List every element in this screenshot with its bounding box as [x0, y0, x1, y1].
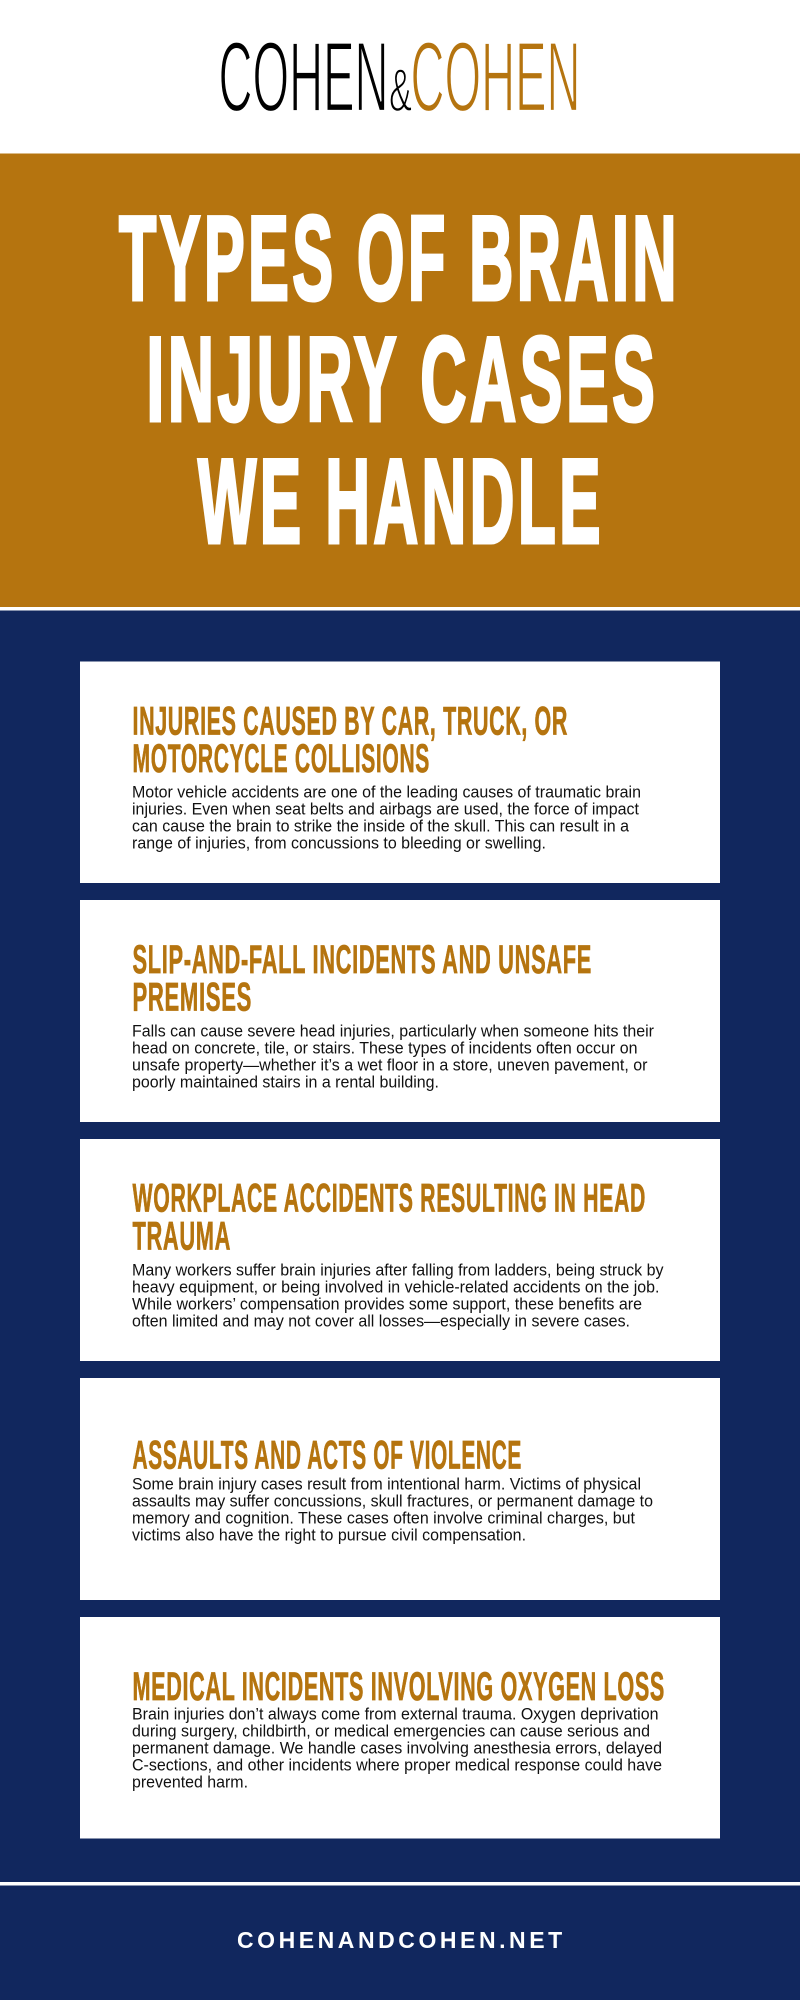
- title: [119, 192, 680, 568]
- panel: medical incidents involving oxygen loss: [80, 1617, 720, 1838]
- heading: TRAUMA: [132, 1214, 231, 1258]
- body text: assaults may suffer concussions, skull fractures, or permanent damage to: [132, 1492, 653, 1510]
- body text: during surgery, childbirth, or medical emergencies can cause serious and: [132, 1722, 650, 1740]
- body text: C-sections, and other incidents where proper medical response could have: [132, 1756, 662, 1774]
- body text: victims also have the right to pursue civil compensation.: [132, 1526, 526, 1544]
- body text: [132, 1022, 654, 1092]
- body text: permanent damage. We handle cases involving anesthesia errors, delayed: [132, 1738, 662, 1758]
- body text: While workers’ compensation provides some support, these benefits are: [132, 1294, 642, 1314]
- body text: Some brain injury cases result from intentional harm. Victims of physical: [132, 1474, 641, 1494]
- heading: [132, 1177, 646, 1258]
- body text: unsafe property—whether it’s a wet floor in a store, uneven pavement, or: [132, 1056, 648, 1074]
- body text: range of injuries, from concussions to bleeding or swelling.: [132, 834, 546, 852]
- body text: heavy equipment, or being involved in vehicle-related accidents on the job.: [132, 1278, 660, 1296]
- heading: [132, 938, 592, 1020]
- navy content background: [0, 610, 800, 2000]
- body text: head on concrete, tile, or stairs. These types of incidents often occur on: [132, 1038, 638, 1058]
- body text: Brain injuries don’t always come from external trauma. Oxygen deprivation: [132, 1704, 658, 1724]
- body text: [132, 1704, 662, 1792]
- body text: poorly maintained stairs in a rental building.: [132, 1072, 439, 1092]
- panel: car, truck, motorcycle collisions: [80, 662, 720, 883]
- body text: prevented harm.: [132, 1772, 248, 1792]
- heading: MOTORCYCLE COLLISIONS: [132, 737, 430, 781]
- body text: injuries. Even when seat belts and airbags are used, the force of impact: [132, 800, 639, 818]
- body text: often limited and may not cover all losses—especially in severe cases.: [132, 1312, 630, 1330]
- logo: Cohen & Cohen: &: [389, 57, 412, 124]
- logo: Cohen & Cohen: COHEN: [218, 21, 388, 132]
- panel: assaults and acts of violence: [80, 1378, 720, 1600]
- panel: slip-and-fall incidents: [80, 900, 720, 1122]
- heading: PREMISES: [132, 976, 252, 1020]
- body text: memory and cognition. These cases often involve criminal charges, but: [132, 1508, 635, 1528]
- heading: [132, 700, 568, 781]
- body text: Motor vehicle accidents are one of the leading causes of traumatic brain: [132, 782, 641, 802]
- text: COHEN: [410, 21, 580, 132]
- body text: Falls can cause severe head injuries, particularly when someone hits their: [132, 1022, 654, 1040]
- title banner: [0, 154, 800, 607]
- body text: Many workers suffer brain injuries after falling from ladders, being struck by: [132, 1260, 664, 1280]
- body text: [132, 782, 641, 852]
- body text: [132, 1474, 653, 1544]
- body text: [132, 1260, 664, 1330]
- panel: workplace accidents: [80, 1139, 720, 1361]
- body text: can cause the brain to strike the inside of the skull. This can result in a: [132, 816, 630, 836]
- footer website: COHENANDCOHEN.NET: [237, 1927, 566, 1953]
